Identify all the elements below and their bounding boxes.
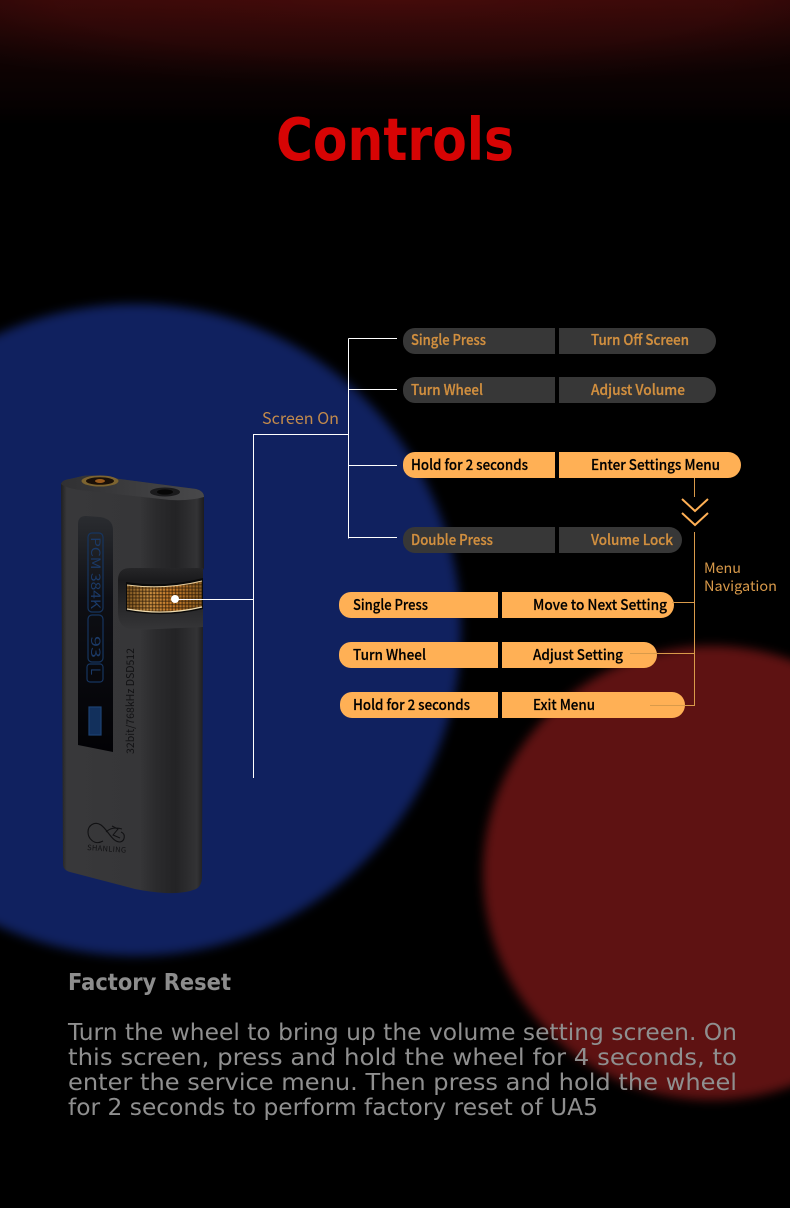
row: turn wheel / adjust volume: Adjust Volume <box>591 379 685 400</box>
row: single press / move to next setting: Move to Next Setting <box>533 594 668 615</box>
label: menu navigation: Navigation <box>704 576 777 596</box>
row: turn wheel / adjust setting: Turn Wheel <box>353 644 426 665</box>
factory reset description: Turn the wheel to bring up the volume setting screen. On <box>67 1020 737 1046</box>
logo <box>87 823 126 856</box>
blue circle backdrop <box>0 304 461 956</box>
icon: double chevron arrow <box>682 499 708 525</box>
row: hold for 2 seconds / exit menu: Exit Menu <box>533 694 595 715</box>
display text: PCM 384K <box>87 537 106 610</box>
row: turn wheel / adjust setting: Adjust Setting <box>533 644 624 665</box>
display text: L <box>87 668 106 675</box>
factory reset description: this screen, press and hold the wheel for 4 seconds, to <box>68 1045 737 1071</box>
row: single press / turn off screen: Turn Off Screen <box>591 329 689 350</box>
row: double press / volume lock: Volume Lock <box>590 529 674 550</box>
title: Controls <box>276 105 514 174</box>
row: turn wheel / adjust volume <box>403 377 716 403</box>
row: hold for 2 seconds / exit menu <box>340 692 685 718</box>
headphone jack 4.4mm gold <box>82 476 118 486</box>
connector lines: screen on tree <box>175 338 397 778</box>
label: screen on: Screen On <box>262 405 339 429</box>
row: single press / turn off screen <box>403 328 716 354</box>
device: Shanling UA5 <box>61 476 204 893</box>
device body <box>61 476 204 893</box>
top cap <box>61 476 204 500</box>
factory reset description: enter the service menu. Then press and hold the wheel <box>68 1070 737 1096</box>
label: menu navigation <box>704 558 777 596</box>
row: double press / volume lock: Double Press <box>411 529 493 550</box>
spec text: 32bit/768kHz DSD512 <box>123 648 138 754</box>
row: hold for 2 seconds / enter settings menu: Enter Settings Menu <box>591 454 720 475</box>
wheel recess <box>118 568 203 630</box>
row: single press / move to next setting: Single Press <box>353 594 428 615</box>
headphone jack 3.5mm black <box>150 488 180 496</box>
row: single press / turn off screen: Single Press <box>411 329 486 350</box>
display text: 93 <box>87 636 106 658</box>
wheel marker dot <box>171 595 179 603</box>
row: hold for 2 seconds / exit menu: Hold for 2 seconds <box>353 694 470 715</box>
heading: factory reset: Factory Reset <box>68 970 231 996</box>
row: double press / volume lock <box>403 527 682 553</box>
factory reset description: for 2 seconds to perform factory reset of UA5 <box>68 1095 598 1121</box>
row: turn wheel / adjust setting <box>339 642 657 668</box>
row: turn wheel / adjust volume: Turn Wheel <box>411 379 483 400</box>
row: single press / move to next setting <box>339 592 674 618</box>
display text <box>87 537 106 675</box>
red circle backdrop <box>483 646 790 1100</box>
display readout <box>87 533 103 735</box>
factory reset description <box>67 1020 737 1121</box>
logo: SHANLING <box>87 842 126 856</box>
display window <box>78 516 113 752</box>
row: hold for 2 seconds / enter settings menu: Hold for 2 seconds <box>411 454 528 475</box>
gold wheel <box>127 581 202 612</box>
connector lines: menu navigation <box>630 478 694 706</box>
row: hold for 2 seconds / enter settings menu <box>403 452 741 478</box>
top red glow <box>0 0 790 125</box>
wheel slot <box>126 578 203 614</box>
label: menu navigation: Menu <box>704 558 741 578</box>
